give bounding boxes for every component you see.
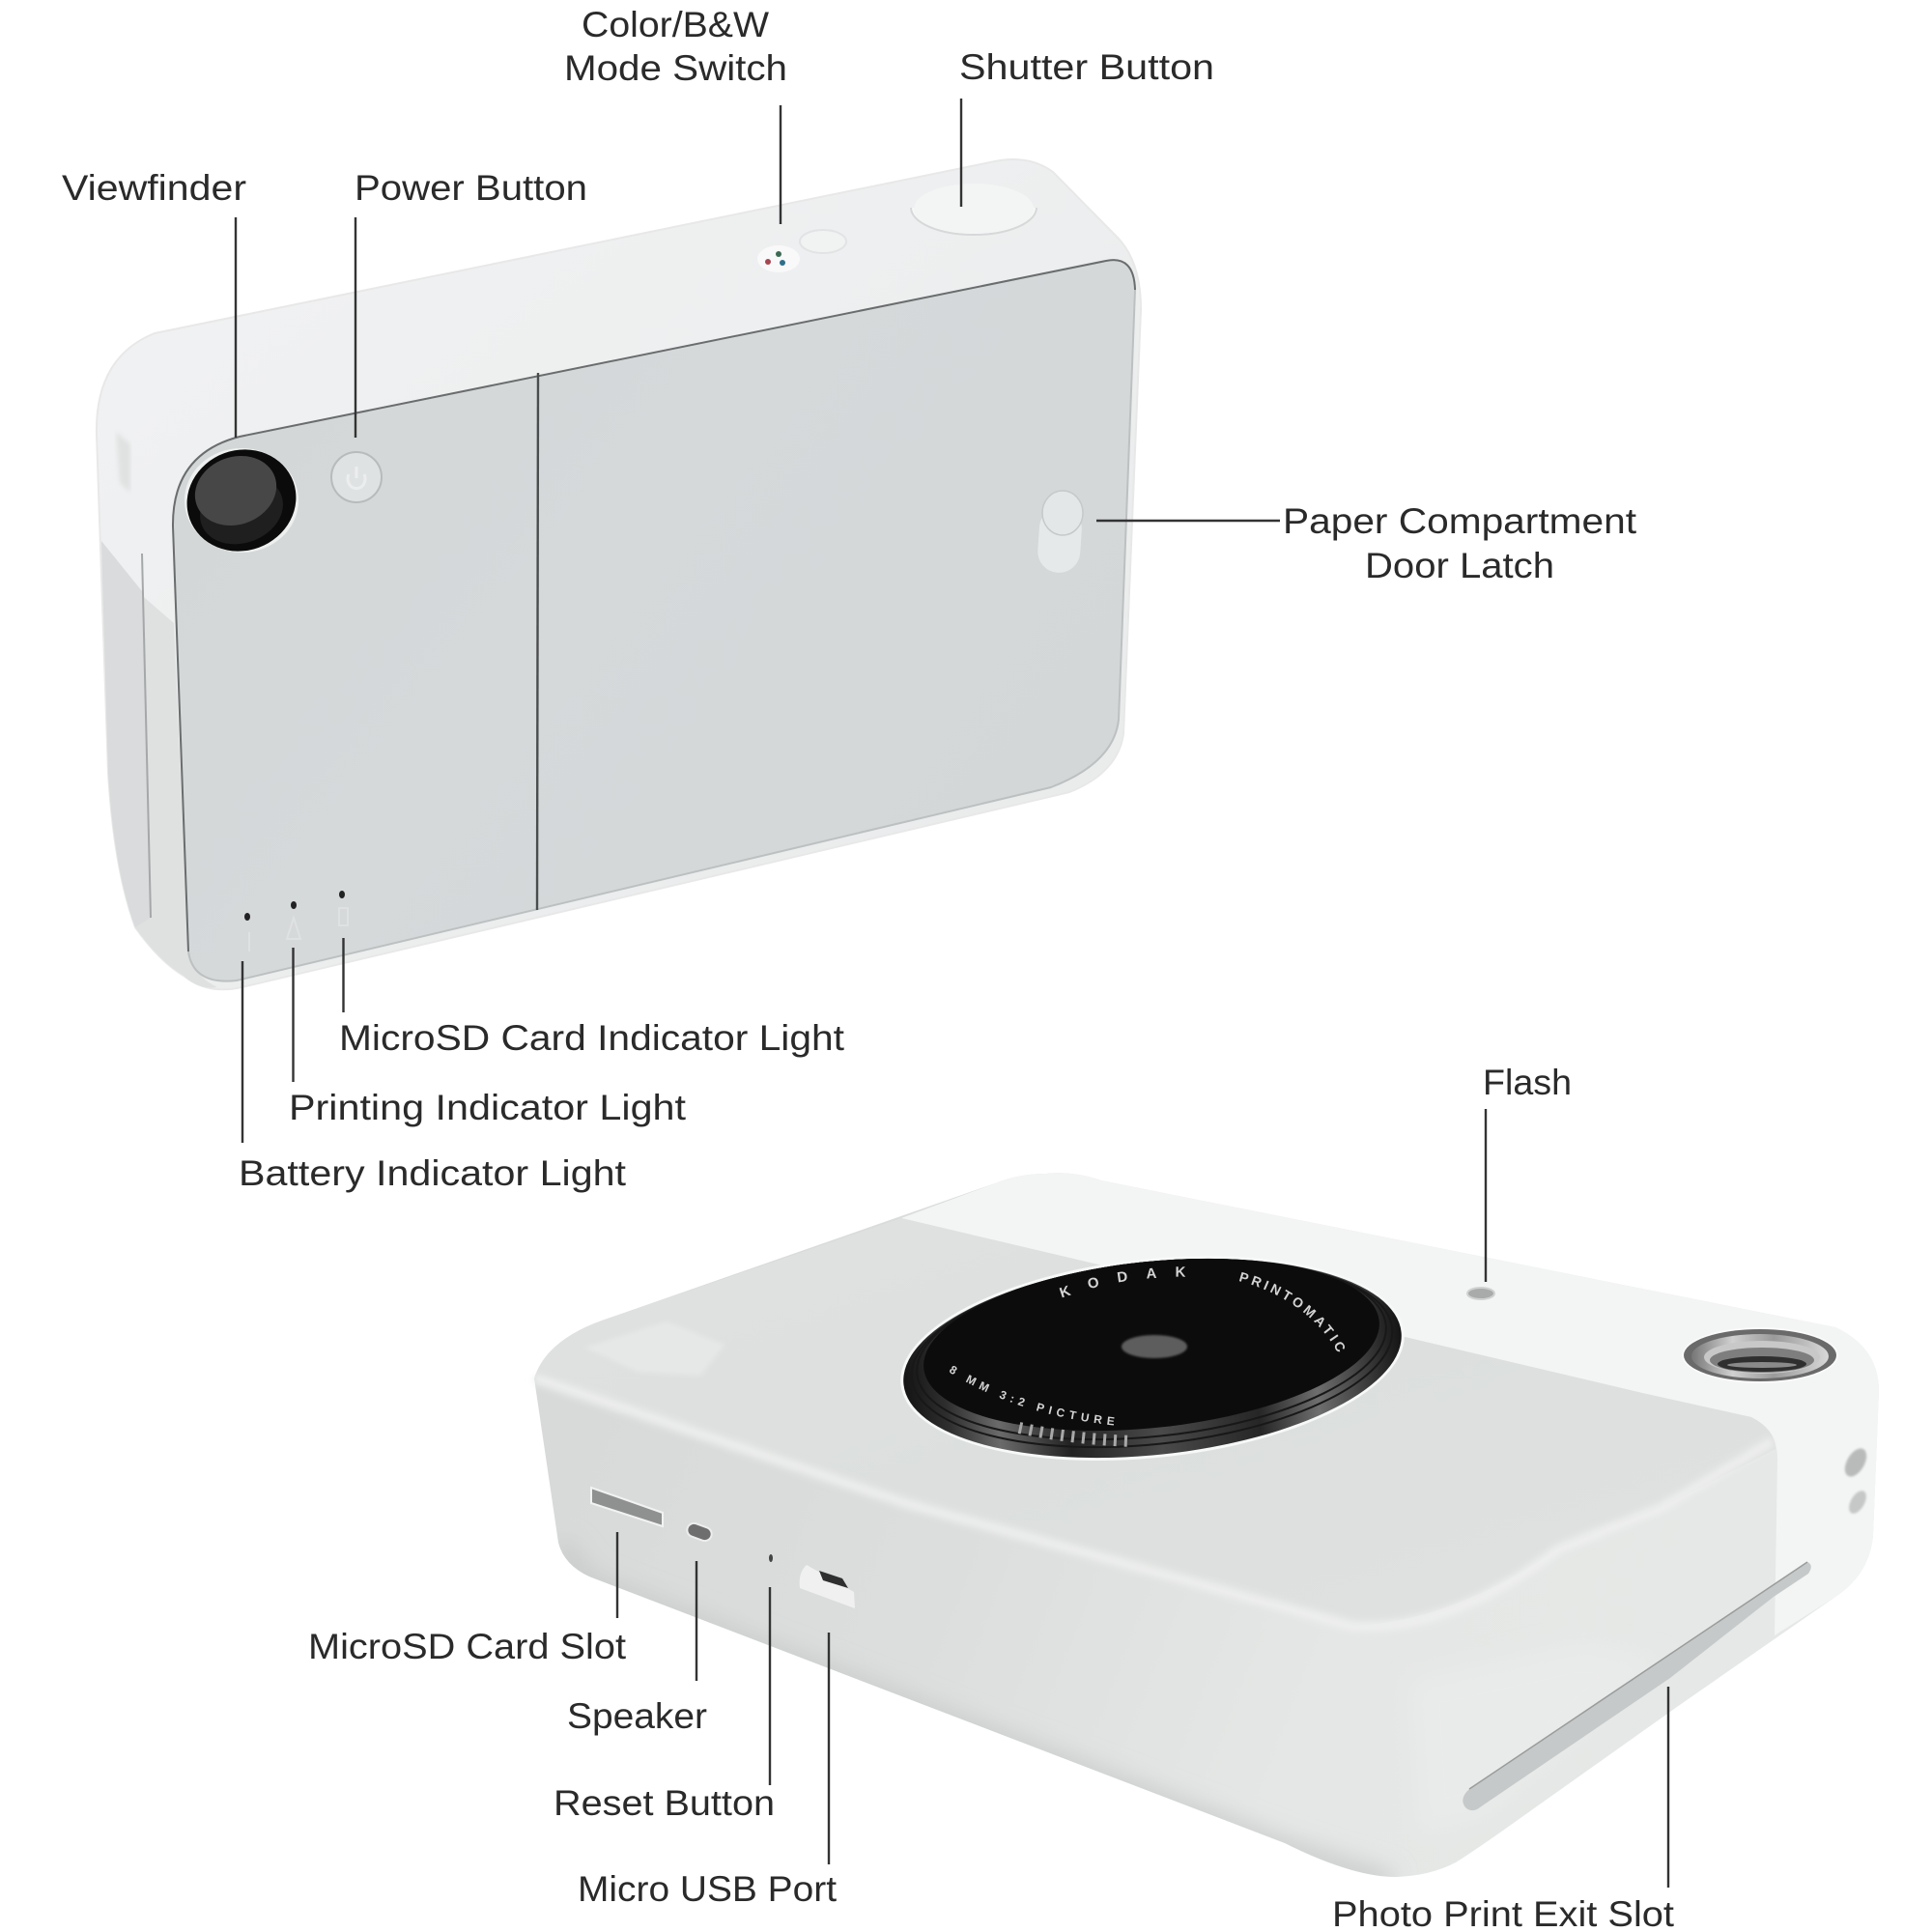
photo print exit slot (1463, 1562, 1811, 1810)
lens centre hole (1122, 1335, 1187, 1358)
label: Battery Indicator Light: Battery Indicator Light (239, 1153, 627, 1193)
label: Viewfinder: Viewfinder (62, 168, 246, 208)
front camera white end (901, 1173, 1879, 1635)
camera: front view (534, 1173, 1879, 1877)
label: Color/B&W Mode Switch: Mode Switch (564, 48, 787, 88)
label: Power Button: Power Button (355, 168, 587, 208)
camera back body shell (97, 159, 1141, 989)
icon: micro USB port (800, 1565, 855, 1608)
reflected text streaks (1019, 1428, 1135, 1441)
label: Shutter Button: Shutter Button (959, 47, 1214, 87)
lens disc (915, 1238, 1388, 1451)
front camera body (534, 1173, 1879, 1877)
plate lower edge highlight (188, 290, 1135, 981)
back plate (173, 260, 1135, 981)
icon: shutter button (911, 184, 1037, 235)
icon: viewfinder lens (173, 435, 310, 566)
icon: reset button (769, 1554, 773, 1562)
icon: threaded mount (1682, 1327, 1838, 1383)
label: Color/B&W Mode Switch: Color/B&W (582, 5, 769, 44)
icon: side vents (1840, 1445, 1871, 1517)
top edge highlight (534, 1378, 1773, 1627)
label: Paper Compartment Door Latch: Door Latch (1365, 546, 1554, 585)
icon: speaker (685, 1521, 714, 1543)
brand text: KODAK (1059, 1266, 1186, 1298)
front corner bright zone (1410, 1642, 1662, 1835)
camera: back view (97, 159, 1141, 989)
label: Micro USB Port: Micro USB Port (578, 1869, 838, 1909)
front camera bottom edge shading (558, 1546, 1391, 1884)
side panel darker section (101, 541, 151, 927)
lens assembly (900, 1258, 1405, 1461)
icon: power button (331, 452, 382, 502)
label: Printing Indicator Light: Printing Indicator Light (289, 1088, 687, 1127)
side seam (142, 554, 151, 918)
lens spec text: 8 MM 3:2 PICTURE (950, 1366, 1115, 1426)
callout lines (236, 99, 1668, 1888)
label: Paper Compartment Door Latch (1283, 501, 1637, 585)
label: Reset Button: Reset Button (554, 1783, 775, 1823)
indicator lights (244, 891, 348, 952)
label: Paper Compartment Door Latch: Paper Compartment (1283, 501, 1637, 541)
icon: mode switch (757, 230, 846, 272)
lens outer ring (894, 1236, 1411, 1481)
lens halo (891, 1233, 1414, 1484)
label: Color/B&W Mode Switch (564, 5, 787, 88)
model text: PRINTOMATIC (1238, 1271, 1345, 1352)
label: MicroSD Card Indicator Light: MicroSD Card Indicator Light (339, 1018, 845, 1058)
icon: Kodak logo (584, 1321, 724, 1376)
lens ring grooves (902, 1237, 1402, 1469)
label: MicroSD Card Slot: MicroSD Card Slot (308, 1627, 627, 1666)
icon: flash (1467, 1288, 1494, 1299)
icon: MicroSD card slot (591, 1488, 663, 1526)
icon: paper door latch (1037, 491, 1083, 574)
paper door seam (537, 373, 538, 910)
plate seam (173, 260, 1135, 952)
label: Flash: Flash (1483, 1063, 1572, 1102)
label: Speaker: Speaker (567, 1696, 707, 1736)
side strap mark (116, 432, 130, 493)
camera back grey side panel (101, 541, 217, 987)
front camera top grey face (534, 1218, 1776, 1626)
